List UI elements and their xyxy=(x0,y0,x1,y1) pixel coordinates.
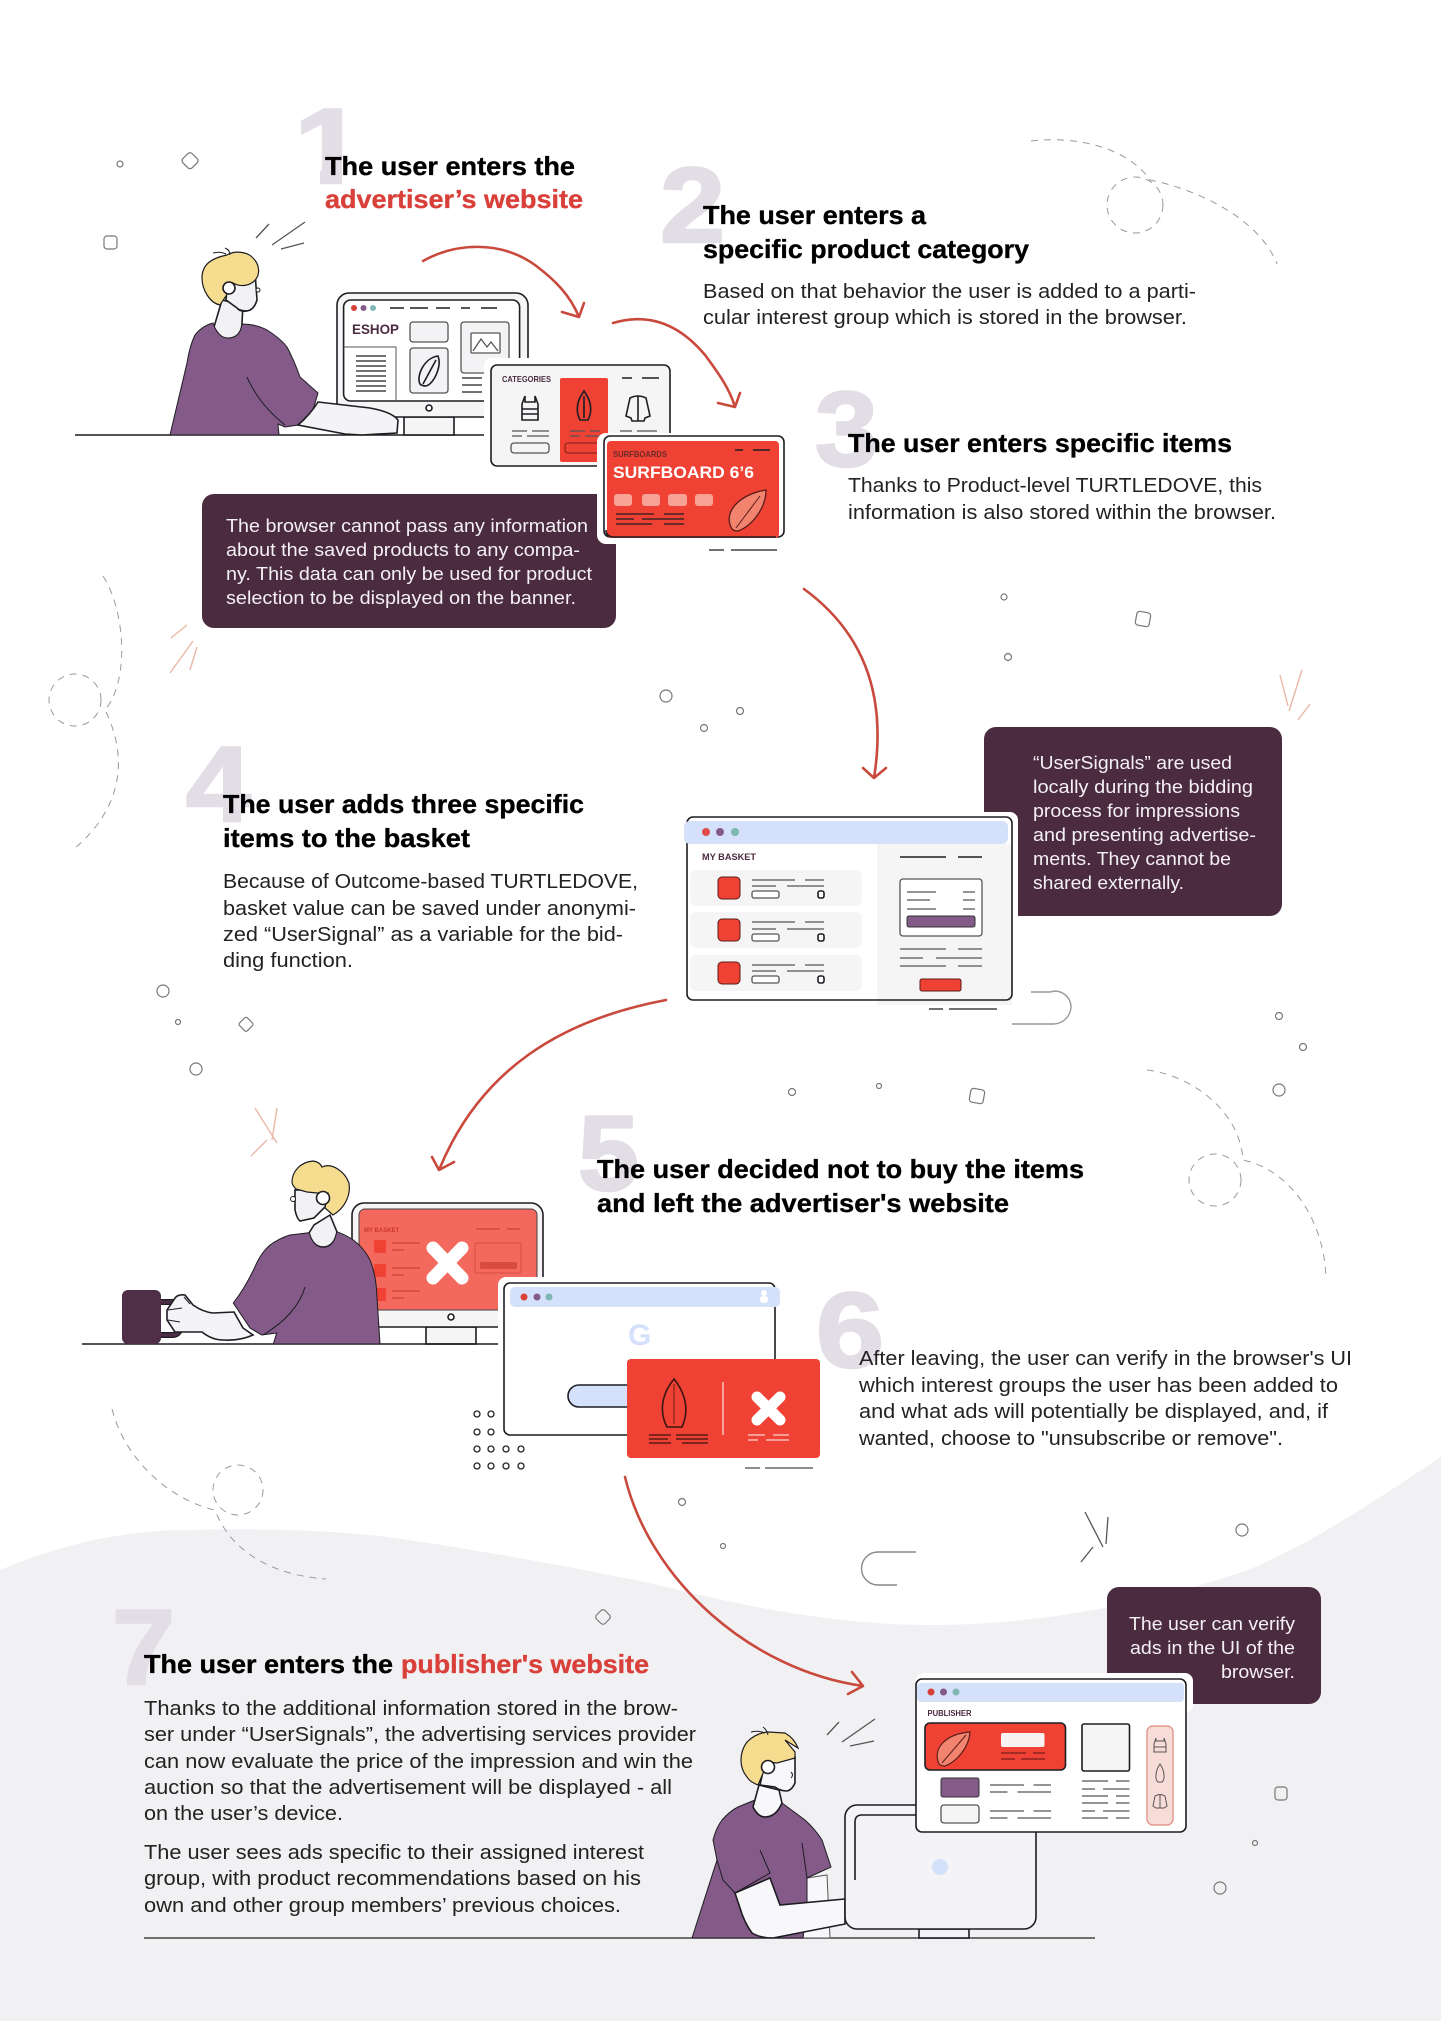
step 4 numeral: 4 xyxy=(186,724,251,844)
callout: verify ads: browser. xyxy=(1221,1661,1295,1682)
heading: step 5: and left the advertiser's website xyxy=(597,1188,1009,1218)
text: step 7 body: can now evaluate the price of the impression and win the xyxy=(144,1751,693,1773)
icon: white x xyxy=(757,1397,780,1420)
ground line: scene 5 xyxy=(82,1343,500,1345)
label: my basket: MY BASKET xyxy=(702,852,756,863)
text: step 4 body: zed “UserSignal” as a variable for the bid- xyxy=(223,924,623,946)
text: step 6 body xyxy=(858,1348,1352,1450)
heading: step 5: The user decided not to buy the items xyxy=(597,1154,1084,1184)
step 1 numeral: 1 xyxy=(294,86,364,206)
label: eshop: ESHOP xyxy=(352,321,399,337)
illustration: person at computer, scene 1 xyxy=(170,222,398,435)
callout: browser data restriction: selection to be displayed on the banner. xyxy=(226,587,576,608)
text: step 4 body xyxy=(223,871,638,972)
text: step 7 body: The user sees ads specific to their assigned interest xyxy=(144,1842,644,1864)
arrow: step 6 to 7 xyxy=(625,1477,863,1694)
heading: step 2 xyxy=(703,200,1030,264)
text: step 6 body: which interest groups the user has been added to xyxy=(858,1375,1338,1397)
ground line: scene 7 xyxy=(144,1937,1095,1939)
callout: UserSignals: “UserSignals” are used xyxy=(1033,752,1232,773)
illustration: basket window xyxy=(682,812,1018,1009)
label: surfboards: SURFBOARDS xyxy=(613,449,667,459)
text: step 2 body: Based on that behavior the user is added to a parti- xyxy=(703,281,1196,303)
basket item 2 xyxy=(690,912,862,948)
text: step 4 body: Because of Outcome-based TURTLEDOVE, xyxy=(223,871,638,893)
text: step 6 body: After leaving, the user can verify in the browser's UI xyxy=(859,1348,1352,1370)
illustration: red unsubscribe card xyxy=(627,1359,820,1468)
text: step 7 body: group, with product recommendations based on his xyxy=(144,1868,641,1890)
illustration: publisher window xyxy=(916,1673,1193,1832)
text: step 3 body: information is also stored within the browser. xyxy=(848,502,1276,524)
arrow: step 3 to 4 xyxy=(804,589,886,778)
callout: UserSignals xyxy=(984,727,1282,916)
order summary card xyxy=(900,879,982,936)
illustration: monitor back xyxy=(845,1805,1036,1938)
text: step 4 body: ding function. xyxy=(223,950,353,972)
decoration: dot matrix xyxy=(474,1411,524,1469)
heading: step 4: The user adds three specific xyxy=(223,789,584,819)
illustration: categories window xyxy=(484,358,676,472)
text: step 7 body: auction so that the advertisement will be displayed - all xyxy=(144,1777,672,1799)
text: step 2 body xyxy=(703,281,1196,329)
ground line: scene 1 xyxy=(75,434,484,436)
basket item 3 xyxy=(690,955,862,991)
label: publisher: PUBLISHER xyxy=(928,1709,972,1718)
heading: step 4 xyxy=(223,789,584,853)
step 6 numeral: 6 xyxy=(816,1270,884,1390)
illustration: surfboard product card xyxy=(597,433,787,550)
text: step 7 body: Thanks to the additional information stored in the brow- xyxy=(144,1698,678,1720)
sidebar ad xyxy=(1147,1726,1173,1825)
callout: UserSignals: process for impressions xyxy=(1033,800,1240,821)
step 5 numeral: 5 xyxy=(578,1093,639,1213)
label: surfboard 6'6: SURFBOARD 6’6 xyxy=(613,463,754,482)
text: step 7 body: on the user’s device. xyxy=(144,1803,343,1825)
arrow: step 1 to 2 xyxy=(423,247,584,317)
heading: step 1 xyxy=(325,151,583,214)
callout: verify ads: The user can verify xyxy=(1129,1613,1296,1634)
heading: step 5 xyxy=(597,1154,1084,1218)
text: step 4 body: basket value can be saved under anonymi- xyxy=(223,898,636,920)
step 7 numeral: 7 xyxy=(112,1587,175,1707)
heading: step 7: The user enters the xyxy=(144,1649,393,1679)
illustration: person with mug xyxy=(122,1161,380,1344)
callout: browser data restriction: The browser cannot pass any information xyxy=(226,515,588,536)
banner ad xyxy=(925,1723,1066,1770)
heading: step 2: specific product category xyxy=(703,234,1030,264)
arrow: step 2 to 3 xyxy=(613,319,740,407)
callout: verify ads xyxy=(1107,1587,1321,1704)
illustration: monitor with rejected basket xyxy=(352,1203,543,1344)
callout: verify ads: ads in the UI of the xyxy=(1130,1637,1295,1658)
heading: step 2: The user enters a xyxy=(703,200,927,230)
heading: step 1: The user enters the xyxy=(325,151,575,181)
illustration: person at laptop, scene 7 xyxy=(692,1719,875,1938)
basket item 1 xyxy=(690,870,862,906)
step 2 numeral: 2 xyxy=(660,145,725,265)
arrow: step 4 to 5 xyxy=(432,1000,666,1170)
callout: UserSignals: locally during the bidding xyxy=(1033,776,1253,797)
illustration: monitor with eshop xyxy=(337,293,528,435)
callout: UserSignals: ments. They cannot be xyxy=(1033,848,1231,869)
step 3 numeral: 3 xyxy=(815,369,878,489)
callout: browser data restriction: ny. This data can only be used for product xyxy=(226,563,592,584)
heading: step 3: The user enters specific items xyxy=(848,428,1232,458)
callout: UserSignals: shared externally. xyxy=(1033,872,1184,893)
label: G logo: G xyxy=(628,1319,651,1352)
text: step 7 body xyxy=(144,1698,696,1917)
icon: white x xyxy=(433,1248,462,1278)
illustration: search browser window xyxy=(498,1277,782,1441)
illustration: monitor with rejected basket: MY BASKET xyxy=(364,1228,400,1234)
text: step 6 body: wanted, choose to "unsubscribe or remove". xyxy=(858,1428,1283,1450)
callout: browser data restriction xyxy=(202,494,616,628)
text: step 2 body: cular interest group which is stored in the browser. xyxy=(703,307,1187,329)
heading: step 7: publisher's website xyxy=(401,1649,649,1679)
callout: browser data restriction: about the saved products to any compa- xyxy=(226,539,580,560)
callout: UserSignals: and presenting advertise- xyxy=(1033,824,1256,845)
text: step 7 body: ser under “UserSignals”, the advertising services provider xyxy=(144,1724,696,1746)
heading: step 7 xyxy=(144,1649,649,1679)
text: step 3 body xyxy=(848,475,1276,524)
text: step 6 body: and what ads will potentially be displayed, and, if xyxy=(859,1401,1328,1423)
label: categories: CATEGORIES xyxy=(502,374,551,384)
text: step 7 body: own and other group members’ previous choices. xyxy=(144,1895,621,1917)
heading: step 1: advertiser’s website xyxy=(325,184,583,214)
text: step 3 body: Thanks to Product-level TURTLEDOVE, this xyxy=(848,475,1262,497)
heading: step 4: items to the basket xyxy=(223,823,470,853)
